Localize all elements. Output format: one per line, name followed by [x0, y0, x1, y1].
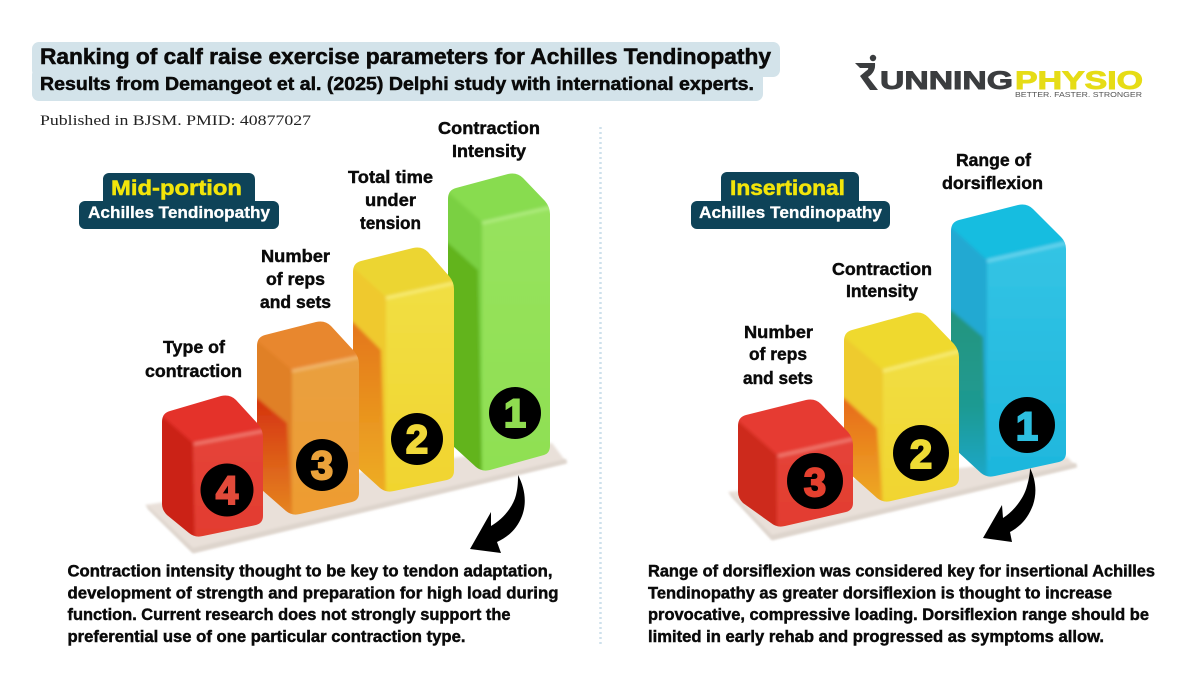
bar 2: contraction intensity: 2 — [910, 433, 932, 477]
labels: mid-portion bars: contraction — [145, 361, 242, 381]
bar chart: mid-portion — [145, 165, 567, 553]
labels: insertional bars: of reps — [749, 344, 807, 364]
logo: Running Physio — [855, 55, 1143, 99]
badge: Insertional — [691, 172, 890, 229]
labels: mid-portion bars: and sets — [260, 292, 331, 312]
labels: mid-portion bars: of reps — [266, 269, 325, 289]
bar 1: contraction intensity — [448, 174, 550, 471]
icon: runner R — [855, 55, 878, 90]
bar 2: total time under tension: 2 — [406, 418, 428, 462]
plate — [728, 457, 1077, 540]
bar 2: total time under tension — [353, 248, 454, 492]
bar 1: contraction intensity: 1 — [504, 392, 526, 436]
labels: insertional bars: Number — [744, 322, 813, 342]
labels: insertional bars: and sets — [743, 368, 813, 388]
text block: insertional finding: limited in early rehab and progressed as symptoms allow. — [648, 628, 1104, 646]
text block: insertional finding: provocative, compressive loading. Dorsiflexion range should be — [648, 606, 1149, 624]
title banner: Results from Demangeot et al. (2025) Delphi study with international experts. — [40, 73, 754, 94]
title banner — [32, 42, 780, 101]
labels: mid-portion bars: under — [365, 190, 416, 210]
badge: Mid-portion: Mid-portion — [111, 177, 242, 200]
labels: mid-portion bars: Contraction — [438, 118, 540, 138]
text block: mid-portion finding — [68, 562, 558, 646]
logo: Running Physio: UNNING — [880, 67, 1013, 95]
plate — [145, 443, 567, 553]
bar 4: type of contraction: 4 — [216, 469, 239, 513]
arrow: insertional — [983, 468, 1035, 542]
text block: mid-portion finding: function. Current research does not strongly support the — [68, 606, 510, 624]
labels: mid-portion bars: Type of — [163, 337, 225, 357]
title banner: Ranking of calf raise exercise parameters for Achilles Tendinopathy — [40, 44, 772, 69]
logo: Running Physio: BETTER. FASTER. STRONGER — [1015, 92, 1142, 99]
bar 1: range of dorsiflexion — [951, 204, 1066, 477]
labels: mid-portion bars: Total time — [348, 167, 433, 187]
labels: insertional bars: Range of — [956, 150, 1031, 170]
badge: Mid-portion — [79, 173, 279, 229]
labels: insertional bars: dorsiflexion — [942, 173, 1043, 193]
bar 3: number of reps and sets: 3 — [804, 461, 826, 505]
bar 4: type of contraction — [162, 396, 263, 537]
bar 1: range of dorsiflexion: 1 — [1016, 405, 1038, 449]
bar chart: insertional — [728, 197, 1077, 540]
labels: mid-portion bars — [145, 118, 540, 381]
bar 3: number of reps and sets — [738, 400, 853, 527]
labels: insertional bars: Intensity — [846, 281, 918, 301]
bar 3: number of reps and sets — [257, 322, 359, 515]
labels: mid-portion bars: Intensity — [452, 141, 526, 161]
text block: insertional finding: Tendinopathy as greater dorsiflexion is thought to increase — [648, 584, 1112, 602]
arrow: mid-portion — [470, 475, 525, 553]
badge: Insertional: Insertional — [730, 177, 845, 200]
badge: Mid-portion: Achilles Tendinopathy — [88, 204, 271, 222]
labels: mid-portion bars: tension — [360, 213, 421, 233]
labels: mid-portion bars: Number — [261, 246, 330, 266]
text block: mid-portion finding: development of strength and preparation for high load during — [68, 584, 558, 602]
bar 3: number of reps and sets: 3 — [311, 444, 333, 488]
logo: Running Physio: PHYSIO — [1015, 67, 1143, 95]
labels: insertional bars: Contraction — [832, 259, 932, 279]
bar 2: contraction intensity — [844, 312, 959, 502]
text block: mid-portion finding: Contraction intensity thought to be key to tendon adaptation, — [68, 562, 552, 580]
badge: Insertional: Achilles Tendinopathy — [699, 204, 883, 222]
text block: insertional finding: Range of dorsiflexion was considered key for insertional Achilles — [648, 562, 1155, 580]
text block: insertional finding — [648, 562, 1155, 646]
publication note: Published in BJSM. PMID: 40877027 — [40, 113, 312, 129]
labels: insertional bars — [743, 150, 1043, 388]
text block: mid-portion finding: preferential use of one particular contraction type. — [68, 628, 466, 646]
